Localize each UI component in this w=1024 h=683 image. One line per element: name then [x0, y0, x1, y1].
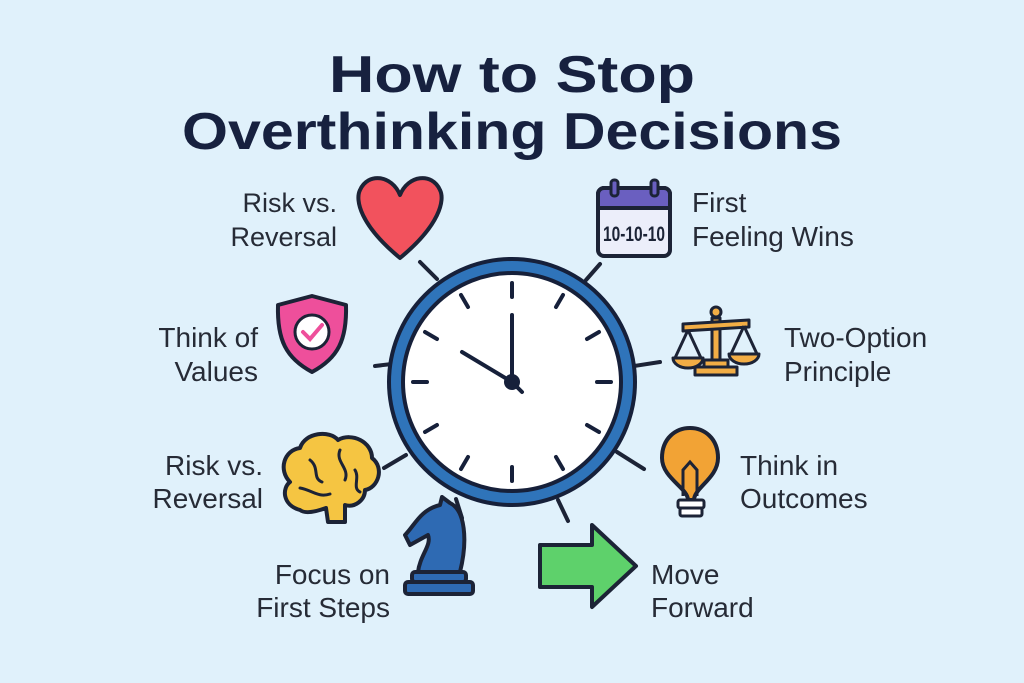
label: think of values: Values: [174, 356, 258, 387]
label: think in outcomes: Think in: [740, 450, 838, 481]
icon: heart: [358, 178, 442, 258]
clock: [389, 259, 635, 505]
label: first feeling wins: [692, 187, 854, 252]
icon: arrow: [540, 525, 636, 607]
icon: brain: [284, 434, 379, 522]
label: think in outcomes: Outcomes: [740, 483, 868, 514]
label: focus on first steps: First Steps: [256, 592, 390, 623]
label: two-option principle: [784, 322, 927, 387]
label: think of values: Think of: [158, 322, 258, 353]
title: Overthinking Decisions: [182, 103, 842, 161]
label: risk vs reversal bottom: Risk vs.: [165, 450, 263, 481]
icon: chess knight: [405, 497, 473, 594]
label: two-option principle: Principle: [784, 356, 891, 387]
label: risk vs reversal bottom: Reversal: [153, 483, 263, 514]
label: think in outcomes: [740, 450, 868, 514]
rays: [375, 262, 660, 521]
label: move forward: Move: [651, 559, 719, 590]
icon: shield: [278, 296, 346, 372]
icon: calendar: 10-10-10: [603, 223, 665, 246]
label: risk vs reversal top: Risk vs.: [242, 188, 337, 218]
label: move forward: Forward: [651, 592, 754, 623]
label: first feeling wins: Feeling Wins: [692, 221, 854, 252]
label: risk vs reversal top: [230, 188, 337, 252]
label: focus on first steps: [256, 559, 390, 623]
label: two-option principle: Two-Option: [784, 322, 927, 353]
label: move forward: [651, 559, 754, 623]
label: focus on first steps: Focus on: [275, 559, 390, 590]
label: think of values: [158, 322, 258, 387]
icon: light bulb: [662, 428, 718, 516]
title: How to Stop: [329, 46, 695, 104]
title: [182, 46, 842, 161]
icon: scales: [673, 307, 759, 375]
icon: calendar: [598, 180, 670, 256]
label: risk vs reversal bottom: [153, 450, 263, 514]
label: first feeling wins: First: [692, 187, 747, 218]
label: risk vs reversal top: Reversal: [230, 222, 337, 252]
